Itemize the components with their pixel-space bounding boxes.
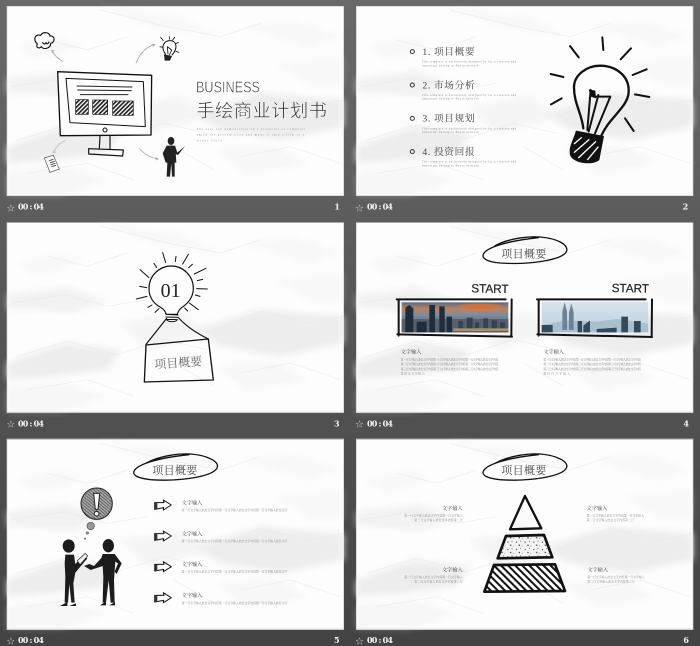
heading: oval title: 项目概要: [501, 246, 547, 260]
list item 1: [154, 498, 288, 512]
list item 2: 第一行文字输入此处文字内容第一行文字输入此处文字内容第一行文字输入此处文字: [182, 539, 288, 543]
arrow: monitor to document: [53, 141, 66, 153]
text block: upper right: 第一行文字输入此处文字内容第一行文字输入: [587, 514, 644, 518]
list item 4: [410, 146, 517, 167]
footer: duration and page: 5: [334, 635, 340, 645]
icon: hanging sign: 项目概要: [154, 353, 203, 372]
footer: duration and page: 00 : 04: [18, 202, 44, 212]
list item 4: 4. 投资回报: [422, 146, 475, 158]
icon: document: [44, 155, 59, 172]
text block: upper left: 第二行文字输入此处文字内容第二行: [414, 518, 463, 522]
image: twin tower skyline: [542, 302, 648, 332]
footer: duration and page: ☆: [6, 420, 15, 431]
panel: slide 6 pyramid: [355, 439, 693, 646]
footer: duration and page: 2: [683, 202, 688, 212]
pyramid tier: top: [510, 496, 541, 529]
icon: standing person: [163, 137, 185, 177]
text block: right: 第二行文字输入此处文字内容第二行文字输入此处文字内容第二行文字输入此处文字内容: [543, 362, 641, 366]
title: BUSINESS: BUSINESS: [196, 79, 260, 96]
text block: left: 第四行文字输入: [401, 372, 425, 376]
footer: duration and page: ☆: [355, 420, 364, 431]
text block: lower right: 第一行文字输入此处文字内容第一行文字输入: [587, 575, 645, 579]
text block: cover description: wider field: [197, 139, 222, 143]
list item 3: 第一行文字输入此处文字内容第一行文字输入此处文字内容第一行文字输入此处文字: [182, 570, 288, 574]
list item 1: 1. 项目概要: [422, 46, 475, 58]
text block: lower left: 第二行文字输入此处文字内容第二行: [414, 579, 463, 583]
heading: oval title: 项目概要: [152, 463, 198, 477]
list item 3: 文字输入: [182, 560, 203, 568]
footer: duration and page: ☆: [355, 203, 364, 214]
label: START left: START: [471, 281, 509, 296]
text block: upper right: [587, 504, 644, 522]
list item 1: This template is exclusively designed by for a creative and: [422, 60, 517, 64]
list item 2: 2. 市场分析: [422, 79, 475, 91]
list item 1: 第一行文字输入此处文字内容第一行文字输入此处文字内容第一行文字输入此处文字: [182, 508, 288, 512]
list item 4: [154, 591, 288, 605]
text block: lower left: 文字输入: [442, 565, 463, 573]
list item 3: important belong to Baotu network: [422, 130, 479, 134]
list item 4: 第一行文字输入此处文字内容第一行文字输入此处文字内容第一行文字输入此处文字: [182, 601, 288, 605]
text block: cover description: enjoy the presentation and make it into a film to a: [197, 132, 305, 136]
footer: duration and page: [6, 418, 340, 431]
text block: right: 第一行文字输入此处文字内容第一行文字输入此处文字内容第一行文字输入此处文字内容: [543, 357, 641, 361]
text block: right: 文字输入: [543, 348, 565, 356]
footer: duration and page: 00 : 04: [367, 418, 393, 428]
icon: numbered light bulb: [136, 253, 207, 322]
footer: duration and page: [6, 202, 340, 214]
list item 4: important belong to Baotu network: [422, 163, 479, 167]
footer: duration and page: 3: [334, 418, 340, 428]
text block: upper right: 第二行文字输入此处文字内容第二行: [587, 518, 634, 522]
list item 3: 3. 项目规划: [422, 113, 475, 125]
list item 2: 文字输入: [182, 529, 203, 537]
footer: duration and page: 00 : 04: [18, 418, 44, 428]
text block: left: 第二行文字输入此处文字内容第二行文字输入此处文字内容第二行文字输入此处文字内容: [401, 362, 499, 366]
footer: duration and page: 4: [683, 418, 689, 428]
footer: duration and page: ☆: [6, 203, 15, 214]
list item 1: 文字输入: [182, 498, 203, 506]
list item 3: [154, 560, 288, 574]
text block: left: [401, 348, 499, 376]
text block: lower right: 文字输入: [587, 565, 609, 573]
list item 4: 文字输入: [182, 591, 203, 599]
list item 2: important belong to Baotu network: [422, 97, 479, 101]
icon: exclamation thought bubble: [81, 488, 112, 540]
text block: left: 第三行文字输入此处文字内容第三行文字输入此处文字内容第三行文字输入此处文字内容: [401, 367, 499, 371]
text block: right: 第四行文字输入: [543, 372, 570, 376]
panel: slide 3 section divider: [6, 222, 344, 431]
text block: upper right: 文字输入: [587, 504, 608, 512]
image: sunset city skyline: [402, 302, 508, 332]
list item 1: important belong to Baotu network: [422, 63, 479, 67]
text block: left: 文字输入: [401, 348, 422, 356]
text block: upper left: 文字输入: [442, 504, 463, 512]
heading: oval title: 项目概要: [501, 463, 547, 477]
label: START right: START: [612, 281, 650, 296]
footer: duration and page: 1: [334, 202, 340, 212]
text block: right: [543, 348, 641, 376]
text block: lower right: [587, 565, 645, 583]
arrow: monitor to bulb: [136, 44, 155, 63]
list item 1: [410, 46, 517, 67]
footer: duration and page: [355, 418, 689, 431]
footer: duration and page: [355, 635, 689, 646]
panel: slide 2 contents: [355, 6, 693, 214]
footer: duration and page: 00 : 04: [18, 635, 44, 645]
list item 3: This template is exclusively designed by for a creative and: [422, 126, 517, 130]
footer: duration and page: 00 : 04: [367, 635, 393, 645]
list item 2: This template is exclusively designed by for a creative and: [422, 93, 517, 97]
text block: upper left: [404, 504, 463, 522]
panel: slide 5 discussion: [6, 439, 344, 646]
panel: slide 1 cover: [6, 6, 344, 214]
list item 2: [410, 79, 517, 101]
heading: oval title: [483, 454, 567, 480]
icon: large light bulb: [551, 37, 649, 163]
icon: numbered light bulb: 01: [161, 280, 181, 302]
list item 3: [410, 113, 517, 134]
arrow: monitor to cloud: [52, 50, 63, 62]
pyramid tier: bottom: [484, 564, 565, 592]
text block: cover description: The user can demonstrate on a projector or computer: [197, 127, 305, 131]
text block: upper left: 第一行文字输入此处文字内容第一行文字输入: [404, 514, 463, 518]
text block: left: 第一行文字输入此处文字内容第一行文字输入此处文字内容第一行文字输入此处文字内容: [401, 357, 499, 361]
chart: pyramid: [484, 496, 565, 592]
text block: lower left: 第一行文字输入此处文字内容第一行文字输入: [404, 575, 463, 579]
text block: right: 第三行文字输入此处文字内容第三行文字输入此处文字内容第三行文字输入此处文字内容: [543, 367, 641, 371]
text block: cover description: [197, 127, 305, 143]
footer: duration and page: [355, 202, 688, 214]
icon: computer monitor: [58, 72, 152, 156]
footer: duration and page: 6: [683, 635, 689, 645]
panel: slide 4 overview with photos: [355, 222, 693, 431]
list: agenda items: [410, 46, 517, 167]
footer: duration and page: 00 : 04: [367, 202, 393, 212]
icon: small light bulb: [160, 37, 179, 61]
icon: two figures talking: [60, 539, 122, 606]
title: Chinese heading: 手绘商业计划书: [196, 97, 327, 123]
frame: left photo: [397, 299, 512, 337]
list item 2: [154, 529, 288, 543]
arrow: monitor to person: [139, 148, 158, 160]
pyramid tier: middle: [498, 535, 552, 558]
icon: cloud: [35, 33, 54, 48]
footer: duration and page: [6, 635, 340, 646]
list item 4: This template is exclusively designed by for a creative and: [422, 160, 517, 164]
heading: oval title: [483, 237, 567, 263]
icon: hanging sign: [144, 318, 213, 382]
text block: lower right: 第二行文字输入此处文字内容第二行: [587, 579, 635, 583]
heading: oval title: [134, 454, 217, 480]
text block: lower left: [404, 565, 463, 583]
frame: right photo: [537, 299, 652, 337]
list: arrow items: [154, 498, 288, 605]
